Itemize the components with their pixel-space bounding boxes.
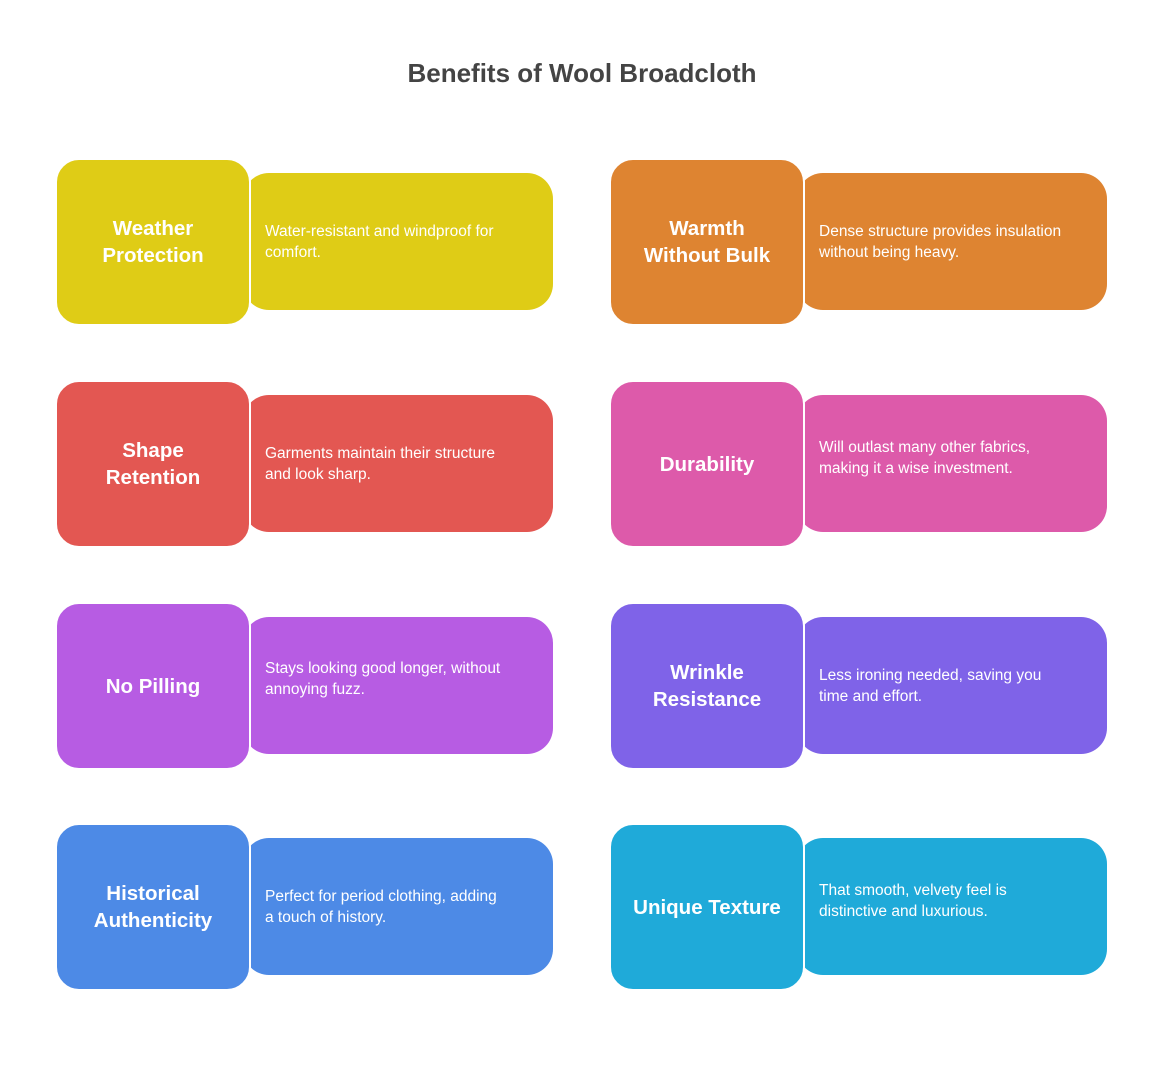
- heading: Durability: [660, 452, 754, 476]
- description: Garments maintain their structure: [265, 444, 495, 462]
- heading: Without Bulk: [644, 244, 770, 267]
- description: distinctive and luxurious.: [819, 902, 988, 920]
- description: comfort.: [265, 244, 321, 260]
- heading: [609, 602, 805, 770]
- heading: Historical: [106, 882, 200, 905]
- description: [243, 395, 553, 532]
- heading: Resistance: [653, 688, 761, 711]
- description: making it a wise investment.: [819, 460, 1013, 476]
- description: Stays looking good longer, without: [265, 660, 500, 676]
- heading: [609, 158, 805, 326]
- description: Water-resistant and windproof for: [265, 222, 494, 240]
- heading: Shape: [122, 439, 184, 462]
- title: Benefits of Wool Broadcloth: [407, 58, 757, 88]
- description: [797, 838, 1107, 975]
- heading: Wrinkle: [670, 661, 744, 684]
- heading: Weather: [113, 217, 193, 240]
- heading: [55, 380, 251, 548]
- heading: [55, 158, 251, 326]
- description: annoying fuzz.: [265, 680, 365, 698]
- heading: [609, 380, 805, 548]
- heading: Retention: [106, 466, 200, 489]
- panel: warmth without bulk: [611, 160, 1107, 324]
- panel: weather protection: [57, 160, 553, 324]
- description: Less ironing needed, saving you: [819, 666, 1041, 684]
- panel: no pilling: [57, 604, 553, 768]
- heading: [55, 602, 251, 770]
- description: Dense structure provides insulation: [819, 222, 1061, 240]
- description: a touch of history.: [265, 908, 386, 926]
- heading: [609, 823, 805, 991]
- description: [797, 173, 1107, 310]
- heading: Protection: [102, 244, 204, 267]
- description: without being heavy.: [819, 244, 959, 260]
- description: Will outlast many other fabrics,: [819, 438, 1030, 456]
- panel: durability: [611, 382, 1107, 546]
- panel: shape retention: [57, 382, 553, 546]
- panel: unique texture: [611, 825, 1107, 989]
- description: [243, 838, 553, 975]
- description: [243, 617, 553, 754]
- description: [797, 617, 1107, 754]
- description: [797, 395, 1107, 532]
- panel: wrinkle resistance: [611, 604, 1107, 768]
- heading: Warmth: [669, 217, 745, 240]
- description: time and effort.: [819, 688, 922, 704]
- description: and look sharp.: [265, 466, 371, 482]
- description: [243, 173, 553, 310]
- heading: Authenticity: [94, 909, 212, 932]
- description: Perfect for period clothing, adding: [265, 888, 497, 904]
- panel: historical authenticity: [57, 825, 553, 989]
- heading: No Pilling: [106, 674, 200, 698]
- heading: Unique Texture: [633, 896, 781, 918]
- description: That smooth, velvety feel is: [819, 882, 1007, 898]
- heading: [55, 823, 251, 991]
